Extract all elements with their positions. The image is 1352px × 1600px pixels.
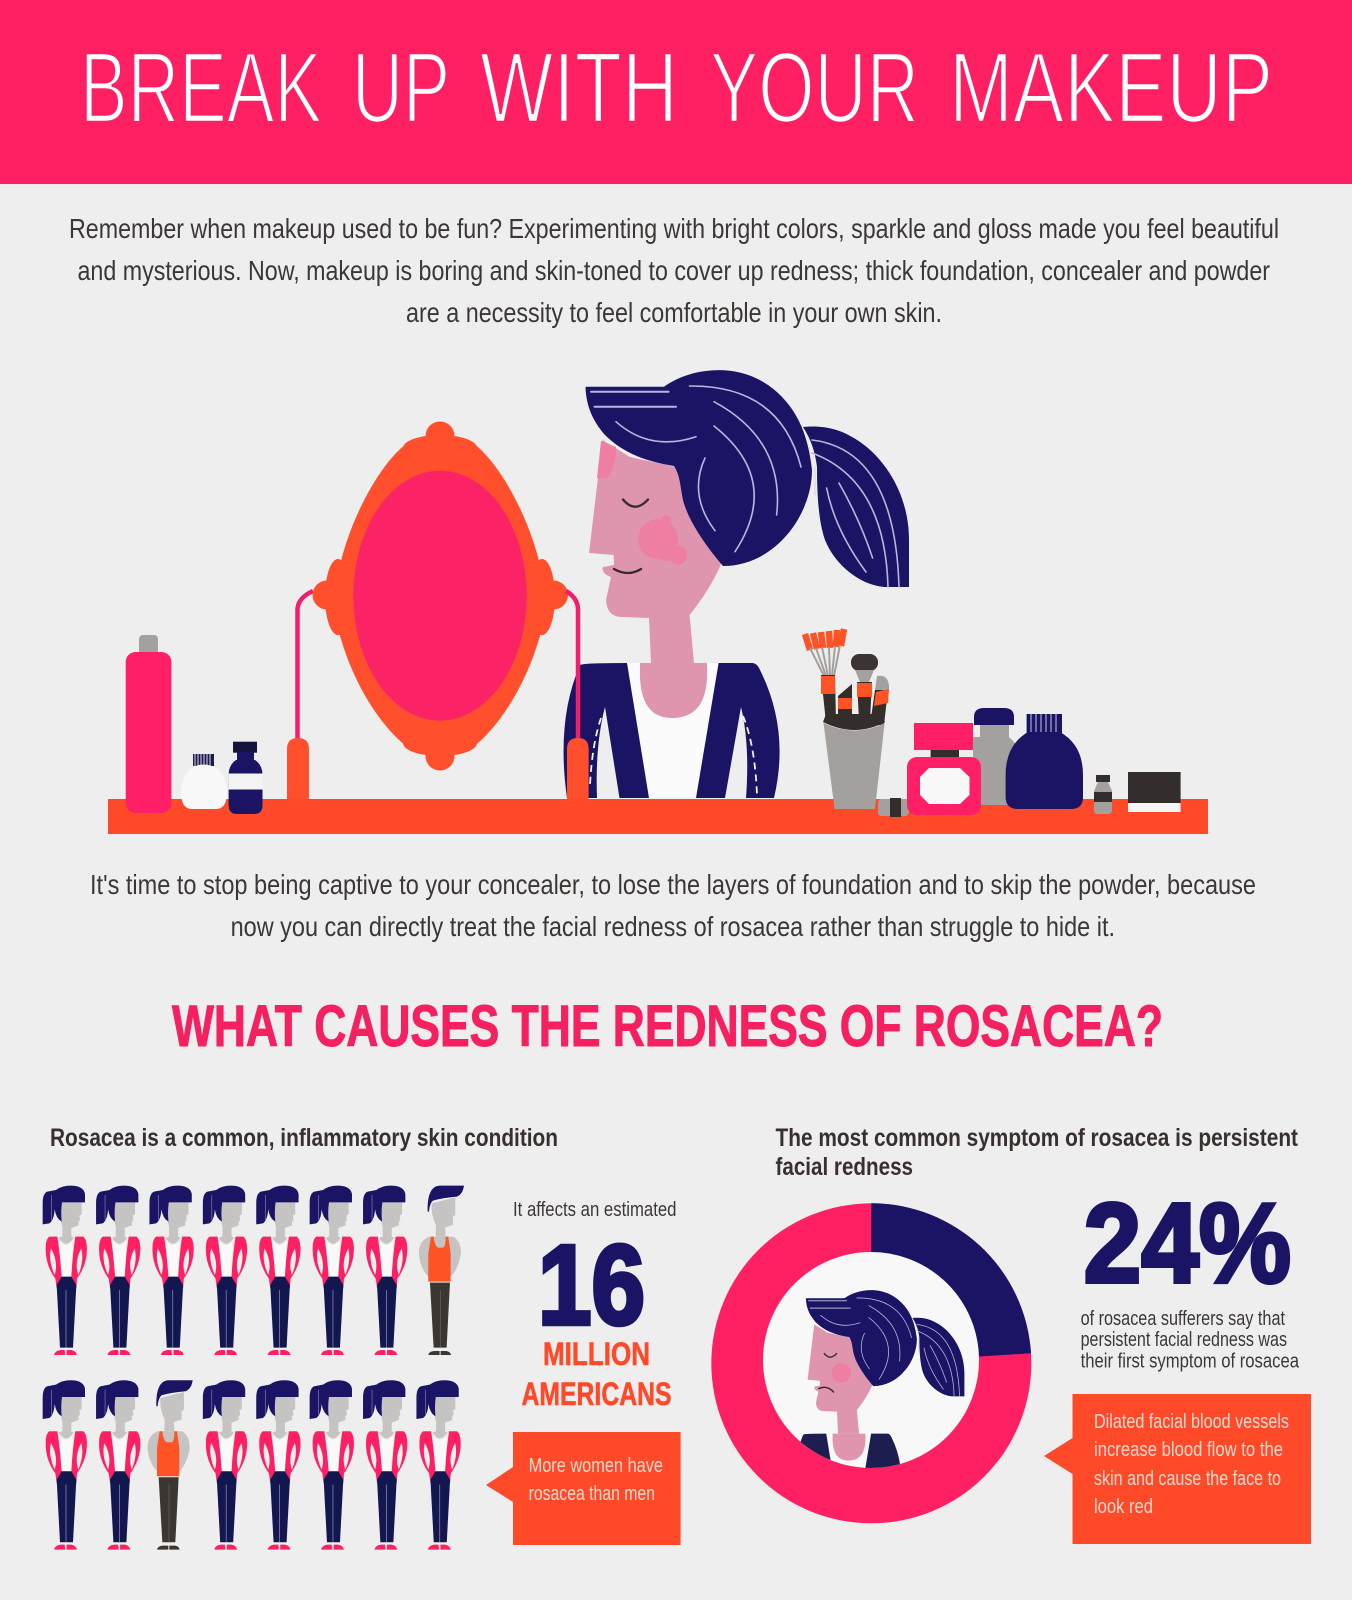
second paragraph: now you can directly treat the facial redness of rosacea rather than struggle to hide it. [231, 911, 1115, 942]
donut chart: 24 percent [711, 1203, 1031, 1523]
stat: 24 percent [1081, 1180, 1299, 1372]
icon: navy bottle [229, 742, 263, 814]
callout: more women: More women have [529, 1454, 663, 1477]
illustration: woman at vanity [108, 370, 1208, 834]
icon: tiny bottle [1094, 775, 1112, 814]
stat: 16 million americans: 16 [538, 1222, 645, 1348]
stat: 24 percent: of rosacea sufferers say that [1081, 1307, 1285, 1330]
title: UP [352, 32, 450, 144]
icon: pink perfume jar [907, 723, 981, 815]
icon: small tube [878, 798, 916, 817]
white top [627, 663, 719, 798]
title banner [0, 0, 1352, 184]
stat: 24 percent: their first symptom of rosacea [1081, 1350, 1299, 1372]
right subheading: facial redness [776, 1153, 913, 1181]
callout: more women: rosacea than men [529, 1482, 655, 1505]
eye and mouth [614, 500, 648, 573]
stat: 16 million americans: MILLION [543, 1336, 650, 1372]
jacket [564, 663, 780, 798]
mirror [287, 422, 568, 799]
icon: gray bottle [973, 708, 1017, 805]
callout: dilated blood vessels: look red [1094, 1495, 1153, 1518]
right subheading [776, 1124, 1299, 1181]
title [80, 32, 1273, 144]
icon: navy jar [1006, 714, 1083, 809]
callout: dilated blood vessels: Dilated facial blood vessels [1094, 1410, 1289, 1433]
right mirror stand over jacket [566, 591, 589, 799]
left subheading: Rosacea is a common, inflammatory skin condition [50, 1124, 558, 1152]
cheek redness [638, 515, 688, 564]
title: WITH [480, 32, 678, 144]
callout: more women [486, 1432, 681, 1545]
pictogram: women and men [43, 1186, 464, 1550]
stat: 16 million americans: It affects an estimated [513, 1198, 676, 1221]
stat: 16 million americans: AMERICANS [522, 1376, 672, 1412]
second paragraph [90, 869, 1256, 942]
neck and collar [640, 663, 707, 718]
callout: dilated blood vessels: skin and cause the face to [1094, 1467, 1281, 1490]
woman figure [564, 370, 909, 799]
face [589, 440, 722, 663]
title: BREAK [80, 32, 322, 144]
intro paragraph [69, 213, 1279, 328]
forehead redness [597, 441, 616, 479]
sad woman portrait [800, 1290, 964, 1468]
title: YOUR [710, 32, 919, 144]
stat: 24 percent: 24% [1084, 1180, 1291, 1306]
callout: dilated blood vessels [1044, 1394, 1311, 1544]
stat: 24 percent: persistent facial redness was [1081, 1328, 1287, 1351]
icon: compact [1128, 772, 1181, 812]
stat: 16 million americans [513, 1198, 676, 1412]
intro paragraph: are a necessity to feel comfortable in your own skin. [406, 297, 942, 328]
icon: white jar [181, 754, 227, 809]
hair [586, 370, 909, 587]
icon: pink spray bottle [126, 635, 171, 813]
icon: brush cup [805, 629, 889, 809]
callout: dilated blood vessels: increase blood flow to the [1094, 1438, 1283, 1461]
shelf [108, 799, 1208, 834]
